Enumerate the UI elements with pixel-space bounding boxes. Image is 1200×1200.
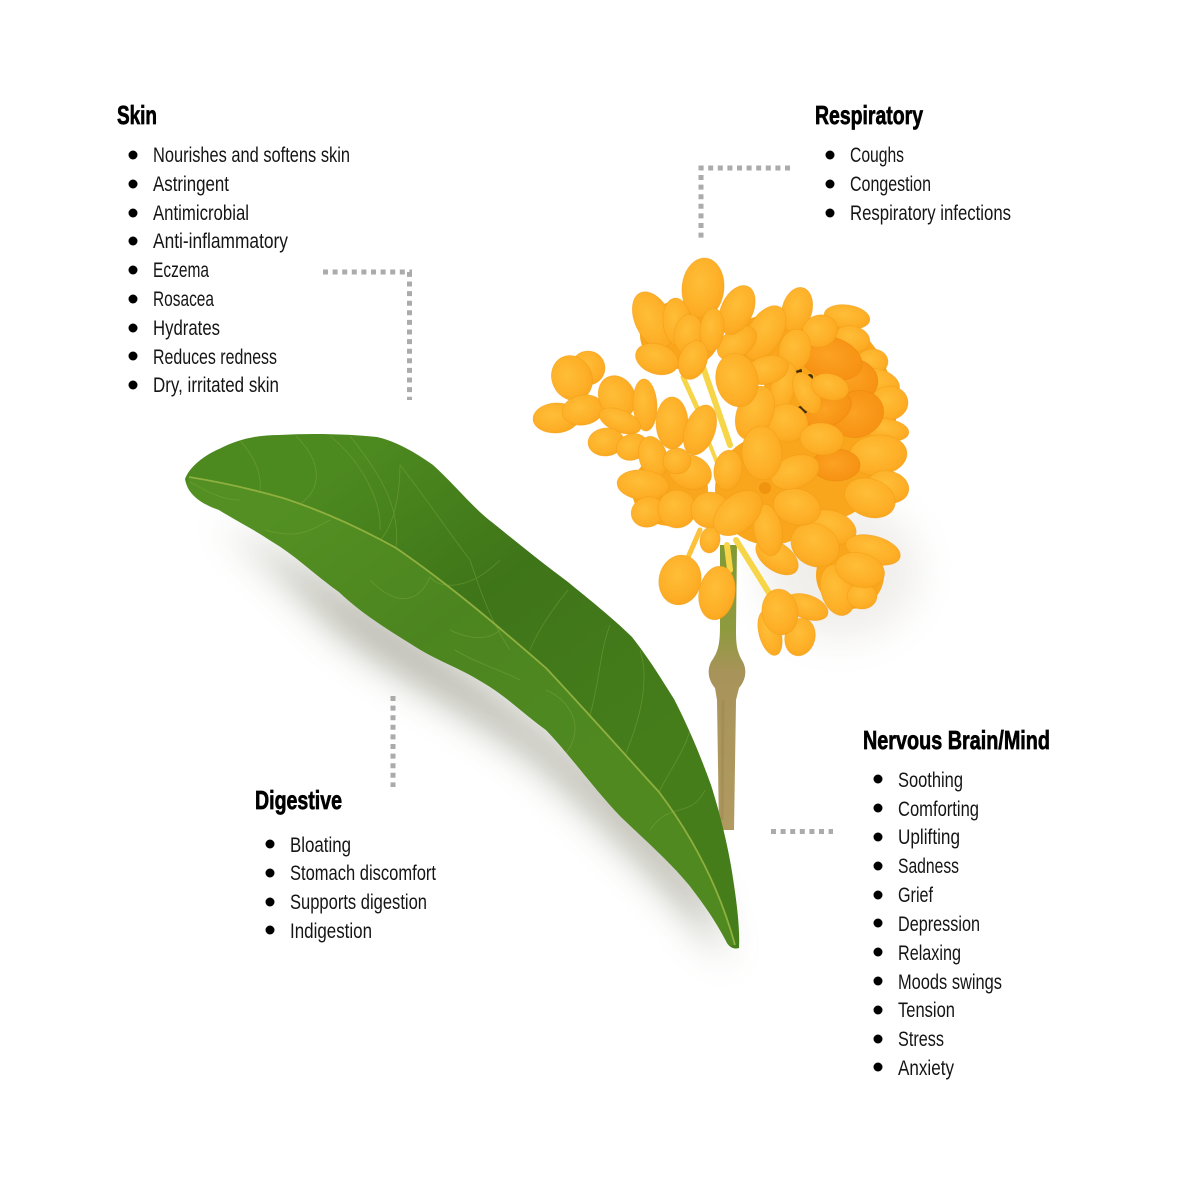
list: skin benefits xyxy=(128,144,350,397)
leaf lower-half highlight xyxy=(180,477,735,950)
open flower and lower right petals xyxy=(698,424,861,582)
list: skin benefits: Anti-inflammatory xyxy=(153,230,288,253)
stem xyxy=(709,545,745,830)
connector: digestive xyxy=(390,696,396,787)
list: skin benefits: Rosacea xyxy=(153,288,214,311)
list: nervous benefits: Stress xyxy=(898,1028,944,1051)
heading: respiratory: Respiratory xyxy=(815,100,923,130)
leaf midrib xyxy=(189,477,735,945)
panel: digestive xyxy=(255,785,436,943)
list: nervous benefits: Comforting xyxy=(898,798,979,821)
left sprig buds xyxy=(532,349,658,465)
list: nervous benefits: Tension xyxy=(898,999,955,1022)
list: respiratory benefits: Congestion xyxy=(850,173,931,196)
list: skin benefits: Nourishes and softens skin xyxy=(153,144,350,167)
panel: nervous brain/mind xyxy=(863,725,1050,1080)
connector: respiratory xyxy=(701,168,790,240)
list: digestive benefits: Supports digestion xyxy=(290,891,427,914)
list: nervous benefits xyxy=(874,769,1002,1080)
list: nervous benefits: Moods swings xyxy=(898,971,1002,994)
list: skin benefits: Antimicrobial xyxy=(153,202,249,225)
flower backing mass xyxy=(632,301,896,609)
list: nervous benefits: Grief xyxy=(898,884,933,907)
lower buds xyxy=(654,529,904,659)
connector: skin xyxy=(323,272,410,400)
list: skin benefits: Hydrates xyxy=(153,317,220,340)
flower shadow xyxy=(760,500,920,640)
list: respiratory benefits xyxy=(826,144,1011,225)
dark flower centre xyxy=(796,368,813,414)
panel: respiratory xyxy=(815,100,1011,225)
list: digestive benefits: Stomach discomfort xyxy=(290,862,436,885)
back right orange petals xyxy=(823,302,912,525)
list: respiratory benefits: Coughs xyxy=(850,144,904,167)
centre buds xyxy=(616,349,782,532)
heading: nervous brain/mind: Nervous Brain/Mind xyxy=(863,725,1050,755)
list: digestive benefits xyxy=(266,834,436,943)
leaf shadow xyxy=(217,522,728,962)
icon: osmanthus flower cluster xyxy=(532,256,912,659)
pedicels xyxy=(670,367,860,596)
list: skin benefits: Eczema xyxy=(153,259,209,282)
petals upper cluster xyxy=(624,256,842,416)
icon: green leaf xyxy=(180,434,739,950)
panel: skin xyxy=(117,100,350,397)
list: nervous benefits: Depression xyxy=(898,913,980,936)
list: nervous benefits: Relaxing xyxy=(898,942,961,965)
leaf veins xyxy=(190,436,705,830)
list: nervous benefits: Soothing xyxy=(898,769,963,792)
list: digestive benefits: Bloating xyxy=(290,834,351,857)
list: digestive benefits: Indigestion xyxy=(290,920,372,943)
list: respiratory benefits: Respiratory infections xyxy=(850,202,1011,225)
list: nervous benefits: Sadness xyxy=(898,855,959,878)
list: skin benefits: Reduces redness xyxy=(153,346,277,369)
list: nervous benefits: Uplifting xyxy=(898,826,960,849)
connector: nervous xyxy=(771,829,833,834)
heading: digestive: Digestive xyxy=(255,785,342,815)
list: skin benefits: Dry, irritated skin xyxy=(153,374,279,397)
heading: skin: Skin xyxy=(117,100,157,130)
list: skin benefits: Astringent xyxy=(153,173,229,196)
list: nervous benefits: Anxiety xyxy=(898,1057,954,1080)
